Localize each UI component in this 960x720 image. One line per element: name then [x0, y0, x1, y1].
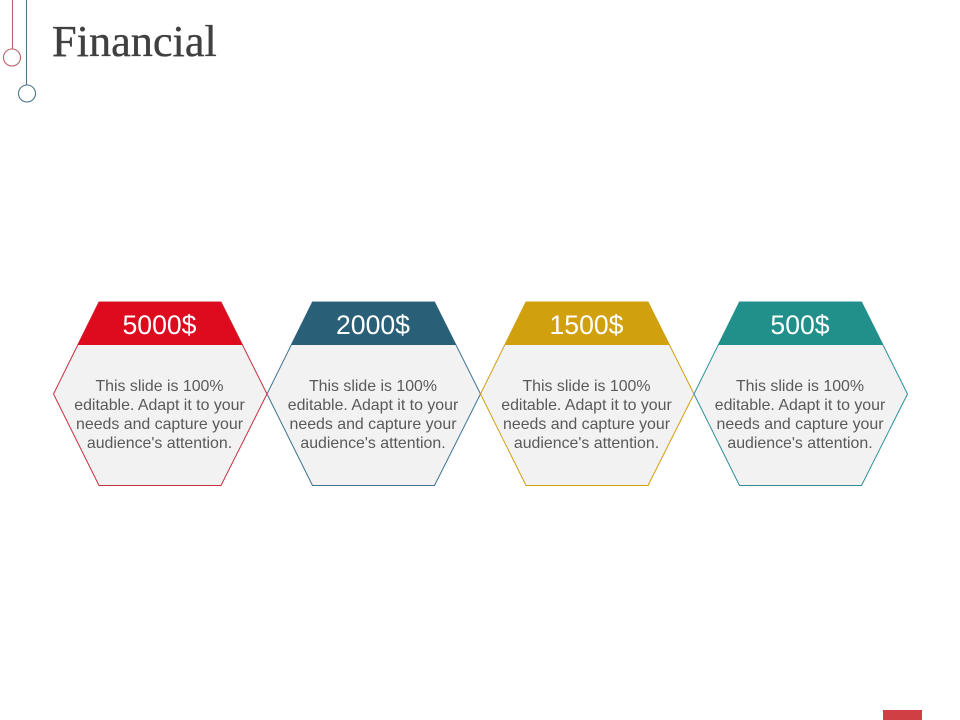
icon: hanging blue circle ornament [18, 0, 36, 102]
description: audience's attention. [727, 435, 873, 452]
panel: 2000$ hexagon [267, 302, 480, 486]
description: audience's attention. [300, 435, 446, 452]
description: needs and capture your [76, 416, 244, 433]
amount: 2000$ [336, 310, 410, 340]
description: audience's attention. [514, 435, 659, 452]
description: This slide is 100% [736, 378, 864, 395]
hexagon outline [54, 302, 267, 486]
description: editable. Adapt it to your [74, 397, 245, 414]
hexagon outline [694, 302, 908, 486]
hexagon outline [480, 302, 694, 486]
description: needs and capture your [290, 416, 457, 433]
header band [78, 302, 242, 345]
header band [718, 302, 883, 345]
description: needs and capture your [717, 416, 884, 433]
title: Financial [52, 17, 217, 66]
header band [504, 302, 670, 345]
panel: 1500$ hexagon [480, 302, 694, 486]
icon: hanging red circle ornament [4, 0, 20, 66]
description: This slide is 100% [309, 378, 437, 395]
description: This slide is 100% [522, 378, 651, 395]
description: editable. Adapt it to your [288, 397, 459, 414]
description: audience's attention. [87, 435, 232, 452]
panel: 500$ hexagon [694, 302, 908, 486]
description: editable. Adapt it to your [715, 397, 886, 414]
panel: 5000$ hexagon [54, 302, 267, 486]
footer red tab [883, 710, 922, 720]
amount: 1500$ [550, 310, 624, 340]
header band [291, 302, 456, 345]
description: This slide is 100% [95, 378, 224, 395]
amount: 500$ [770, 310, 830, 340]
description: needs and capture your [503, 416, 671, 433]
hexagon outline [267, 302, 480, 486]
description: editable. Adapt it to your [501, 397, 672, 414]
amount: 5000$ [123, 310, 197, 340]
